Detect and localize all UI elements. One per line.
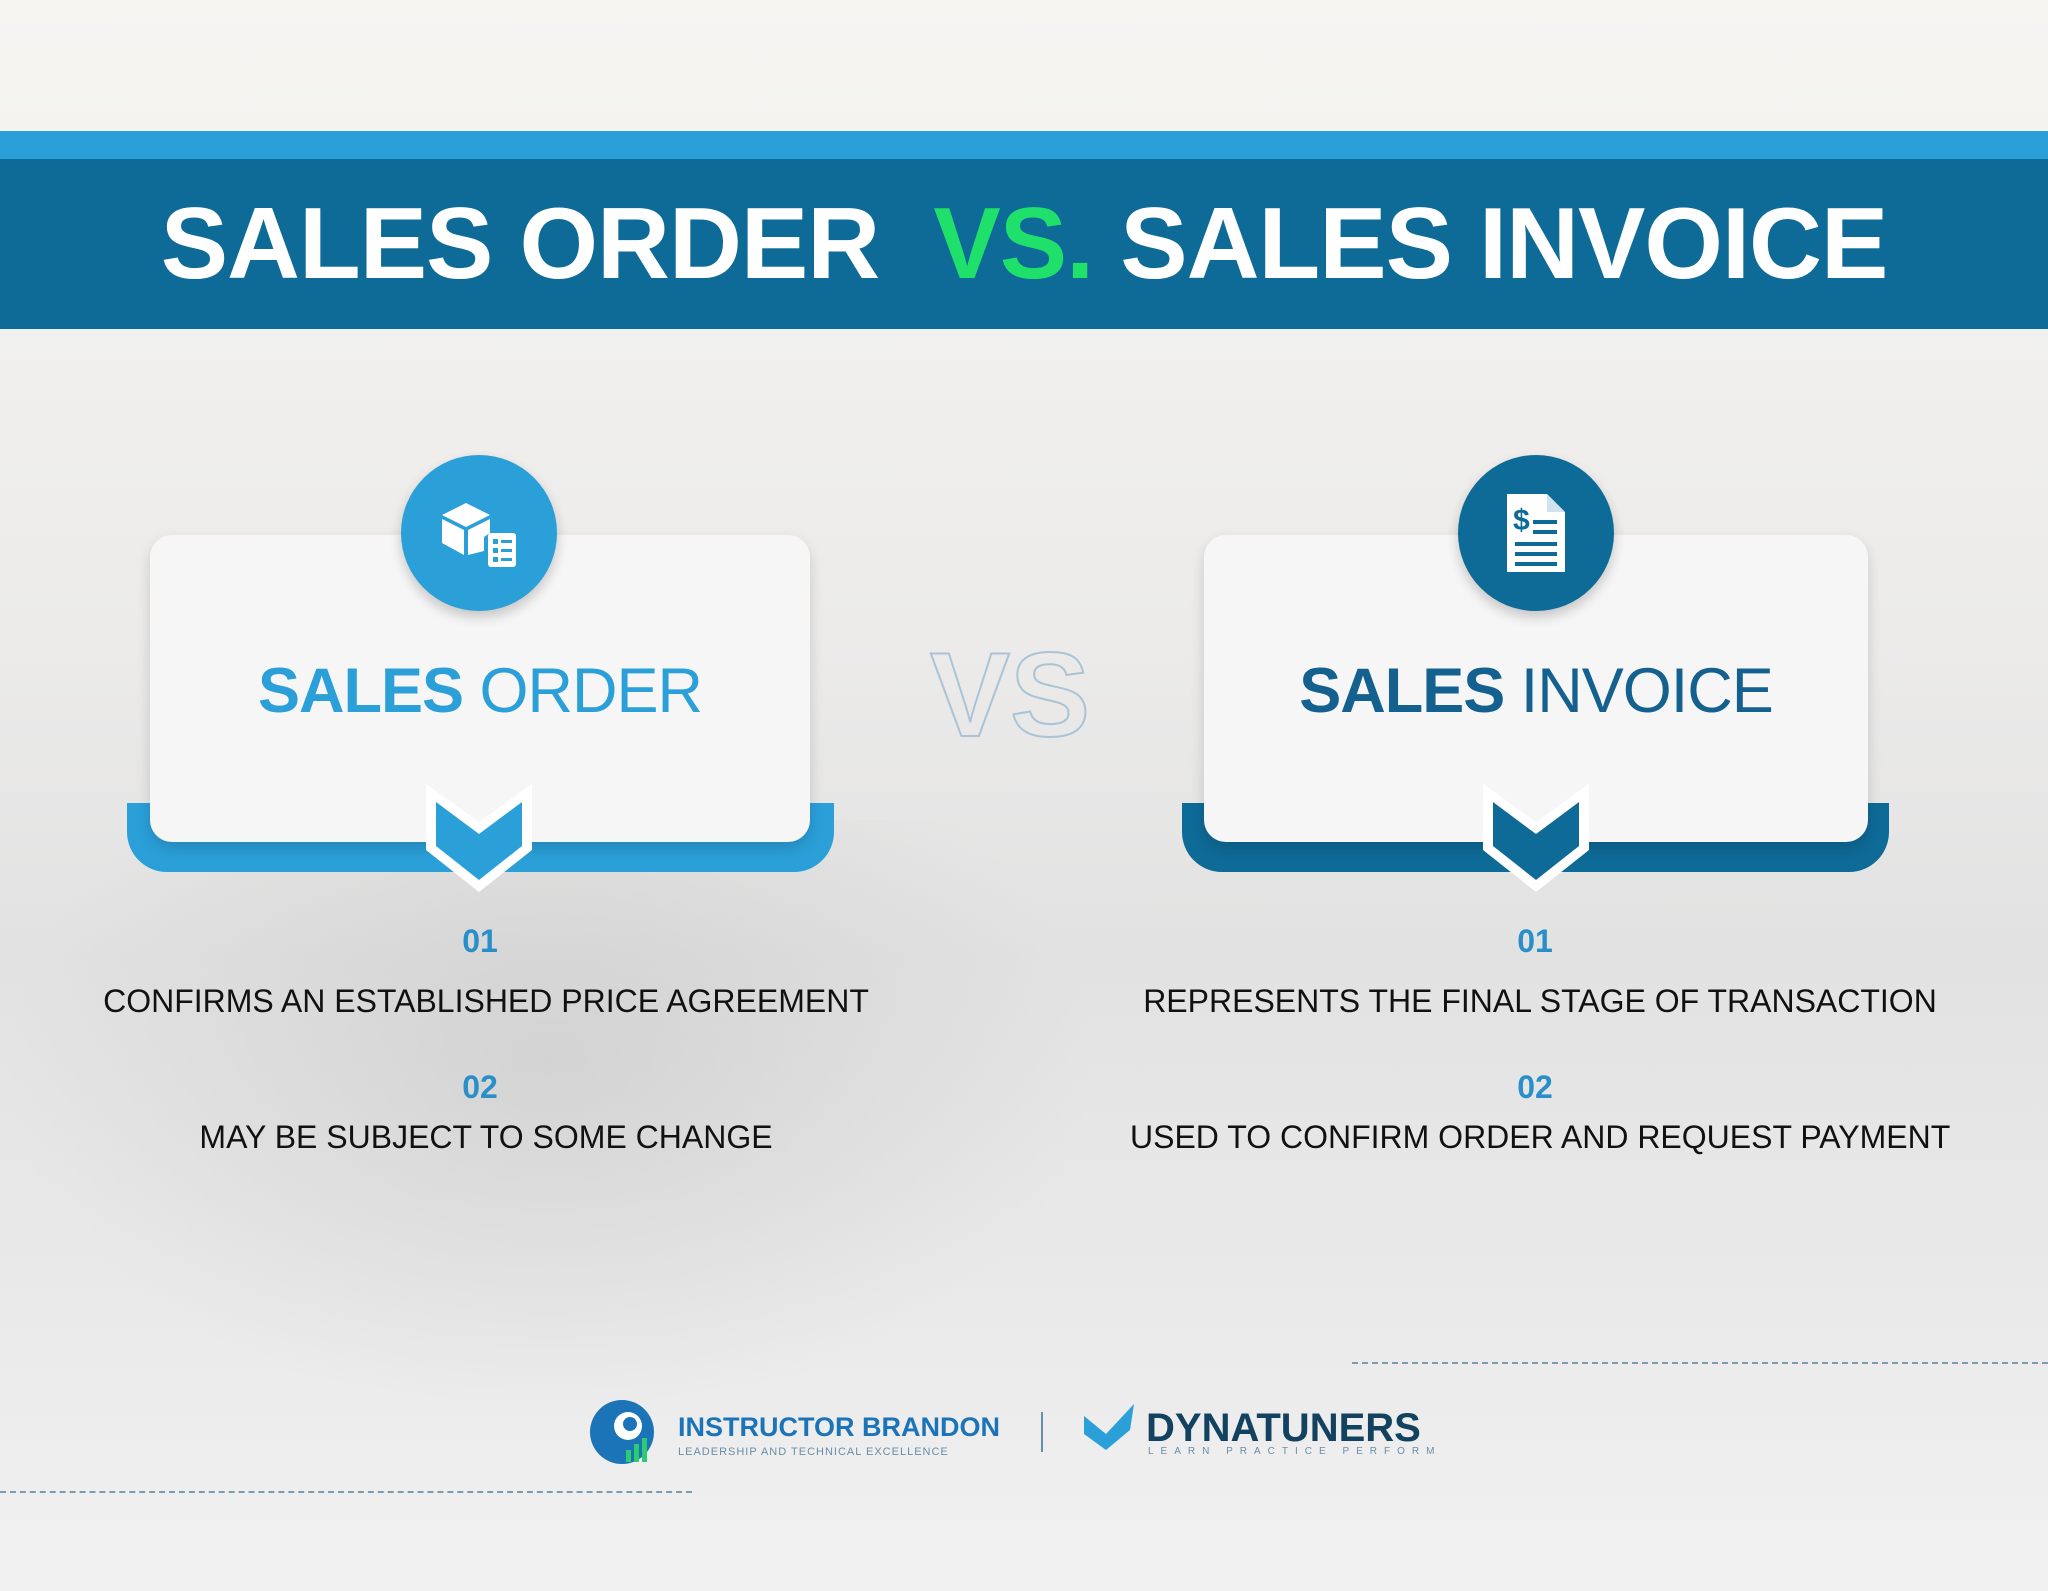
right list: USED TO CONFIRM ORDER AND REQUEST PAYMENT [1130,1119,1950,1155]
heading: sales invoice: SALES INVOICE [1299,656,1773,726]
logo: dynatuners: LEARN PRACTICE PERFORM [1148,1446,1441,1457]
logo: instructor brandon: LEADERSHIP AND TECHNICAL EXCELLENCE [678,1446,949,1458]
title banner: SALES ORDER [161,188,879,300]
footer logos [590,1400,1441,1464]
icon: invoice: $ [1513,504,1530,537]
title banner [0,159,2048,329]
icon: box with checklist [401,455,557,611]
title banner: VS. [933,188,1093,300]
left list: MAY BE SUBJECT TO SOME CHANGE [199,1119,773,1155]
item 01 right: 01 [1517,923,1553,959]
logo: dynatuners [1084,1404,1441,1457]
card right [1204,535,1868,842]
chevron right [1483,784,1589,892]
top accent stripe [0,131,2048,159]
base bar right [1182,803,1889,872]
right list [1130,923,1950,1155]
card left [150,535,810,842]
panel: sales order [127,455,834,892]
chevron left [426,784,532,892]
item 02 left: 02 [462,1069,498,1105]
item 01 left: 01 [462,923,498,959]
left list: CONFIRMS AN ESTABLISHED PRICE AGREEMENT [103,983,869,1019]
logo: instructor brandon: INSTRUCTOR BRANDON [678,1412,1000,1442]
right list: REPRESENTS THE FINAL STAGE OF TRANSACTION [1143,983,1937,1019]
icon: invoice [1458,455,1614,611]
base bar left [127,803,834,872]
dashed lines [1352,1362,2048,1364]
left list [103,923,869,1155]
panel: sales invoice [1182,455,1889,892]
logo: instructor brandon [590,1400,1000,1464]
background photo haze [0,820,1100,1420]
title banner: SALES INVOICE [1120,188,1887,300]
heading: sales order: SALES ORDER [258,656,702,726]
item 02 right: 02 [1517,1069,1553,1105]
logo: dynatuners: DYNATUNERS [1146,1406,1421,1450]
